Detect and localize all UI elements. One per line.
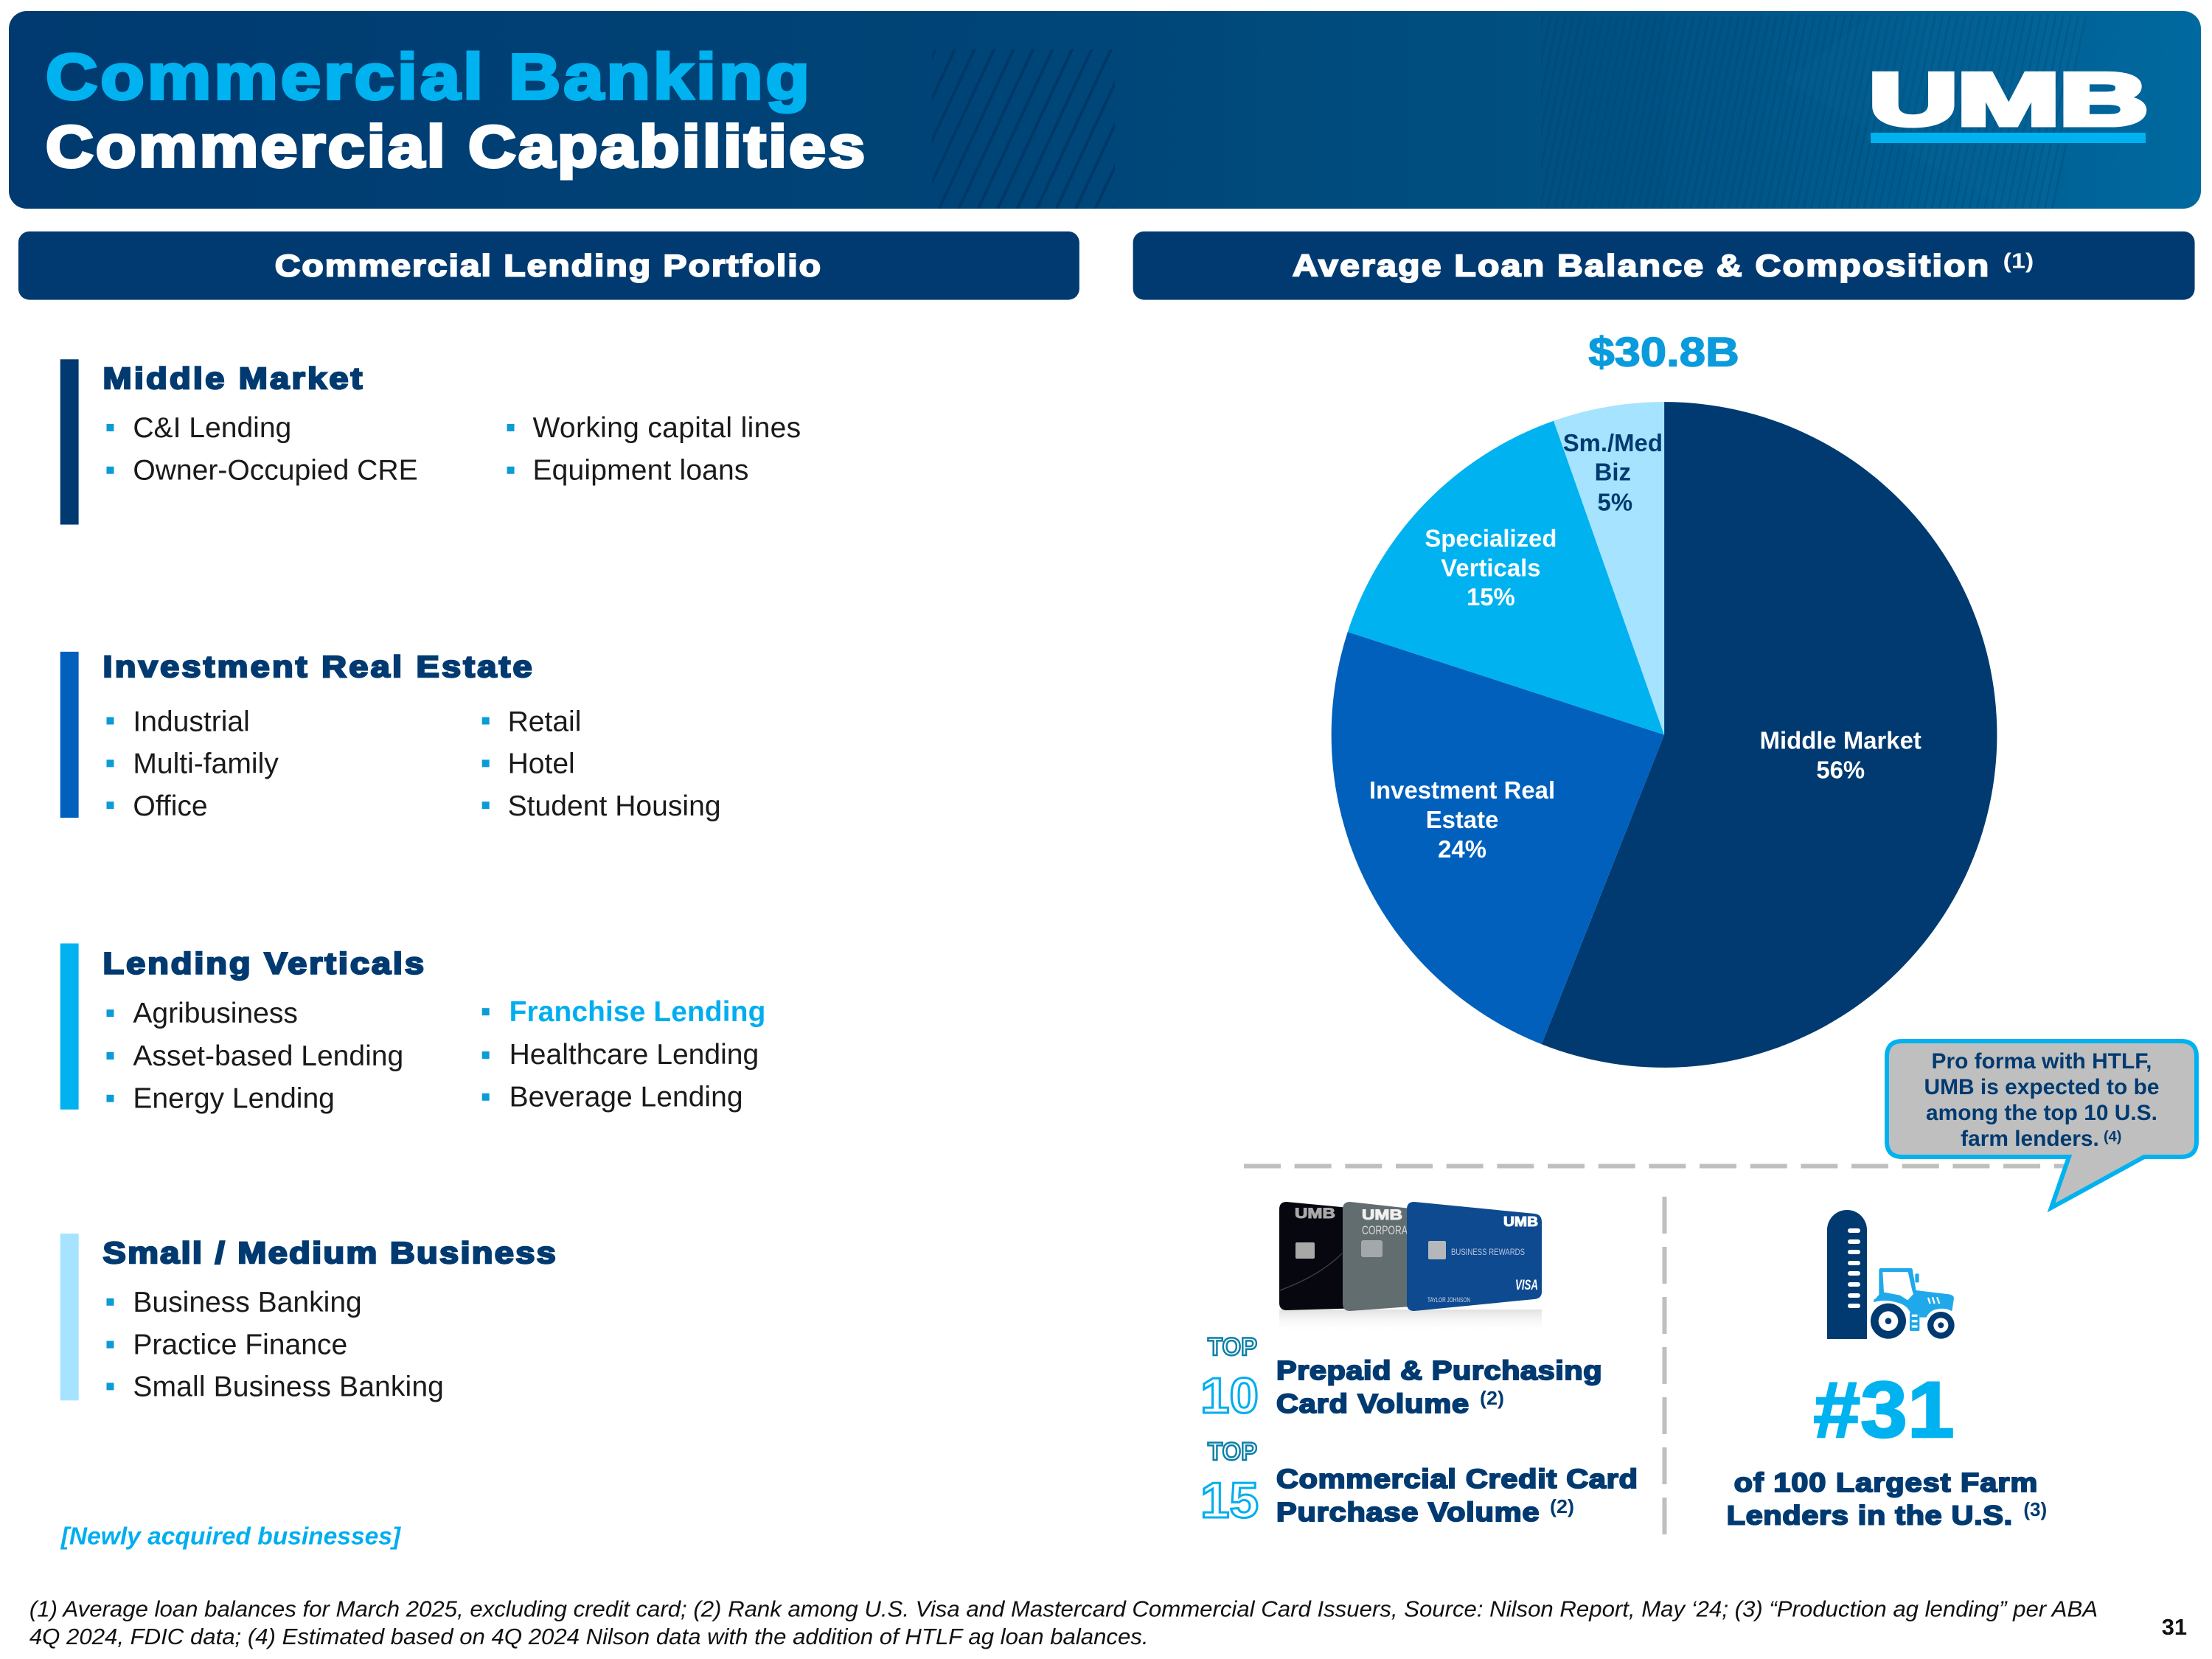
panel: investment real estate xyxy=(60,650,721,822)
section header: average loan balance and composition xyxy=(1133,232,2195,300)
panel: small / medium business xyxy=(60,1234,556,1402)
panel: small / medium business: Business Banking xyxy=(133,1287,362,1318)
panel: middle market: Owner-Occupied CRE xyxy=(133,455,418,487)
slice: investment real estate 24%: Investment Real xyxy=(1369,776,1555,804)
card: gray xyxy=(1343,1202,1430,1311)
slice: small/medium business 5%: Biz xyxy=(1595,459,1631,486)
divider: vertical dashed xyxy=(1662,1197,1666,1538)
stat: top 10 prepaid and purchasing: TOP xyxy=(1208,1333,1257,1361)
panel: investment real estate: Industrial xyxy=(133,706,250,738)
stat: top 10 prepaid and purchasing: Prepaid & Purchasing xyxy=(1276,1356,1602,1385)
pie chart: loan composition xyxy=(1332,402,1997,1068)
section header: average loan balance and composition: Average Loan Balance & Composition xyxy=(1293,248,1989,283)
slice: small/medium business 5%: Sm./Med xyxy=(1563,429,1663,456)
callout: pro forma with HTLF: (4) xyxy=(2104,1129,2121,1145)
divider: horizontal dashed xyxy=(1244,1164,2065,1168)
note: newly acquired businesses: [Newly acquired businesses] xyxy=(60,1523,401,1550)
panel: lending verticals: Energy Lending xyxy=(133,1083,335,1115)
stat: top 15 commercial credit card: 15 xyxy=(1200,1472,1259,1528)
slice: middle market 56%: Middle Market xyxy=(1760,726,1921,754)
panel: small / medium business: Practice Finance xyxy=(133,1329,347,1361)
panel: investment real estate: Hotel xyxy=(508,748,575,779)
panel: lending verticals xyxy=(60,944,765,1115)
callout: pro forma with HTLF: UMB is expected to be xyxy=(1924,1075,2159,1099)
card: blue: BUSINESS REWARDS xyxy=(1451,1247,1525,1257)
text: of 100 largest farm lenders xyxy=(1727,1468,2047,1531)
stat: top 15 commercial credit card xyxy=(1200,1438,1638,1528)
icon: silo and tractor xyxy=(1827,1210,1955,1339)
chart total: $30.8B: $30.8B xyxy=(1588,328,1739,375)
stat: top 10 prepaid and purchasing: 10 xyxy=(1200,1368,1259,1424)
slice: small/medium business 5% xyxy=(1554,402,1664,734)
section header: commercial lending portfolio: Commercial Lending Portfolio xyxy=(275,248,821,283)
panel: lending verticals: Asset-based Lending xyxy=(133,1040,403,1072)
stat: top 10 prepaid and purchasing: (2) xyxy=(1480,1387,1504,1409)
stat: top 15 commercial credit card: Commercial Credit Card xyxy=(1276,1464,1638,1494)
panel: middle market: Working capital lines xyxy=(532,412,801,444)
panel: investment real estate: Investment Real Estate xyxy=(103,650,532,684)
slice: investment real estate 24%: Estate xyxy=(1426,806,1498,833)
text: of 100 largest farm lenders: of 100 Largest Farm xyxy=(1734,1468,2037,1498)
panel: investment real estate: Student Housing xyxy=(508,790,721,822)
panel: lending verticals: Beverage Lending xyxy=(509,1082,743,1113)
card: blue: TAYLOR JOHNSON xyxy=(1427,1296,1470,1304)
stat: #31 farm lender: #31 xyxy=(1813,1366,1955,1454)
section header: commercial lending portfolio xyxy=(18,232,1079,300)
panel: lending verticals: Healthcare Lending xyxy=(509,1039,759,1071)
text: of 100 largest farm lenders: Lenders in the U.S. xyxy=(1727,1501,2012,1531)
panel: investment real estate: Office xyxy=(133,790,208,822)
card: gray: CORPORA xyxy=(1362,1223,1408,1237)
panel: lending verticals: Franchise Lending xyxy=(509,996,765,1028)
card: blue: UMB xyxy=(1503,1214,1538,1229)
slice: investment real estate 24% xyxy=(1332,632,1664,1044)
callout: pro forma with HTLF: Pro forma with HTLF, xyxy=(1932,1049,2152,1074)
panel: middle market xyxy=(60,359,801,525)
slice: investment real estate 24%: 24% xyxy=(1438,835,1486,863)
page number: 31 xyxy=(2162,1614,2187,1640)
footnotes xyxy=(29,1596,2098,1649)
panel: small / medium business: Small / Medium Business xyxy=(103,1237,556,1270)
card: blue: VISA xyxy=(1515,1278,1538,1293)
slice: middle market 56% xyxy=(1542,402,1997,1068)
stat: top 15 commercial credit card: Purchase Volume xyxy=(1276,1498,1539,1527)
card: black: UMB xyxy=(1295,1206,1335,1222)
title line 1: Commercial Banking xyxy=(46,41,810,113)
slice: specialized verticals 15% xyxy=(1348,421,1664,734)
UMB logo: UMB xyxy=(1869,58,2148,141)
card: blue xyxy=(1407,1202,1542,1311)
callout: pro forma with HTLF xyxy=(1887,1041,2197,1208)
text: of 100 largest farm lenders: (3) xyxy=(2023,1500,2047,1520)
UMB logo xyxy=(1869,58,2148,143)
image: UMB commercial cards xyxy=(1279,1202,1542,1333)
footnotes: 4Q 2024, FDIC data; (4) Estimated based on 4Q 2024 Nilson data with the addition of HTLF ag loan balances. xyxy=(29,1624,1149,1649)
stat: top 10 prepaid and purchasing xyxy=(1200,1333,1602,1424)
callout: pro forma with HTLF: among the top 10 U.S. xyxy=(1926,1101,2157,1125)
panel: middle market: Equipment loans xyxy=(532,455,748,487)
section header: average loan balance and composition: (1) xyxy=(2003,250,2034,274)
panel: lending verticals: Agribusiness xyxy=(133,998,298,1029)
header banner xyxy=(9,11,2201,209)
panel: investment real estate: Retail xyxy=(508,706,581,738)
callout: pro forma with HTLF: farm lenders. xyxy=(1961,1127,2099,1151)
slice: specialized verticals 15%: 15% xyxy=(1467,583,1515,611)
slice: small/medium business 5%: 5% xyxy=(1598,489,1632,516)
stat: top 15 commercial credit card: (2) xyxy=(1550,1495,1574,1517)
stat: top 10 prepaid and purchasing: Card Volume xyxy=(1276,1389,1469,1419)
panel: lending verticals: Lending Verticals xyxy=(103,947,424,981)
stat: top 15 commercial credit card: TOP xyxy=(1208,1438,1257,1466)
card: gray: UMB xyxy=(1362,1208,1402,1223)
slice: specialized verticals 15%: Specialized xyxy=(1425,524,1557,552)
panel: middle market: Middle Market xyxy=(103,362,363,395)
footnotes: (1) Average loan balances for March 2025, excluding credit card; (2) Rank among U.S. Visa and Mastercard Commercial Card Issuers, Source: Nilson Report, May ‘24; (3) “Production ag lending” per ABA xyxy=(29,1596,2098,1621)
panel: investment real estate: Multi-family xyxy=(133,748,279,779)
card: black xyxy=(1279,1202,1364,1310)
panel: small / medium business: Small Business Banking xyxy=(133,1371,444,1402)
title line 2: Commercial Capabilities xyxy=(46,113,865,179)
slice: specialized verticals 15%: Verticals xyxy=(1441,554,1541,581)
slice: middle market 56%: 56% xyxy=(1816,756,1865,783)
panel: middle market: C&I Lending xyxy=(133,412,291,444)
